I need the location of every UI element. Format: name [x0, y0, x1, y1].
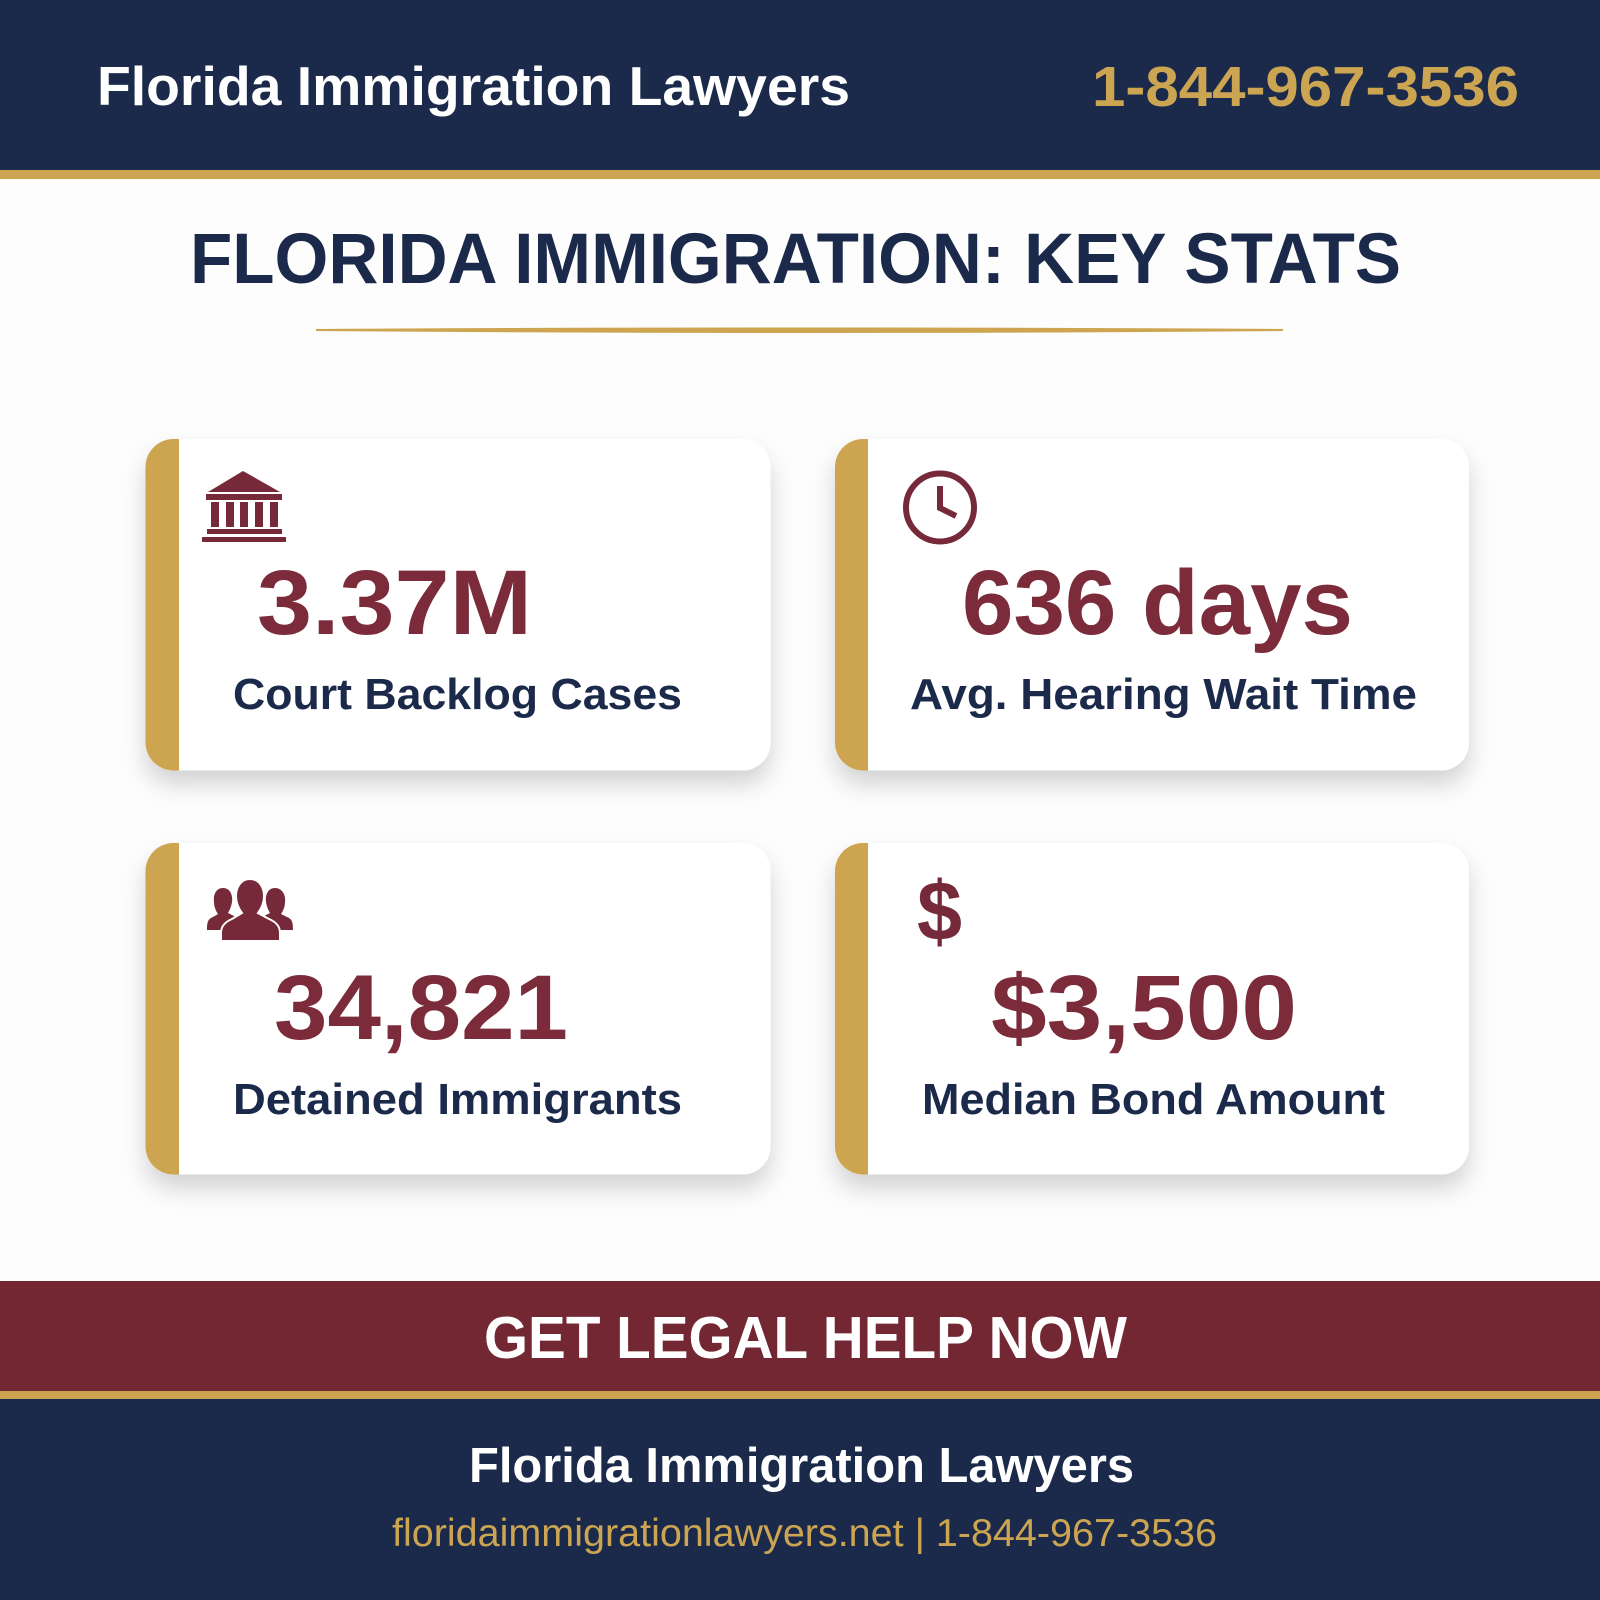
panel: hearing wait — [835, 439, 1469, 770]
center person — [221, 879, 280, 941]
header phone number: 1-844-967-3536 — [1092, 55, 1519, 119]
panel: court backlog — [146, 439, 770, 770]
icon: dollar sign: $ — [917, 864, 962, 958]
stat label: Avg. Hearing Wait Time — [910, 670, 1417, 719]
icon: clock — [906, 474, 974, 542]
title: FLORIDA IMMIGRATION: KEY STATS — [190, 220, 1401, 299]
header band — [0, 0, 1600, 179]
footer firm name: Florida Immigration Lawyers — [469, 1439, 1134, 1493]
stat label: Detained Immigrants — [233, 1075, 682, 1124]
title underline — [316, 328, 1283, 333]
panel: bond — [835, 843, 1469, 1174]
stat value: 34,821 — [274, 957, 568, 1059]
header firm name: Florida Immigration Lawyers — [97, 55, 850, 117]
icon: courthouse — [202, 471, 286, 542]
call to action band — [0, 1281, 1600, 1391]
call to action band: GET LEGAL HELP NOW — [484, 1305, 1127, 1371]
stat label: Median Bond Amount — [922, 1075, 1385, 1124]
footer — [0, 1391, 1600, 1600]
stat value: $3,500 — [991, 957, 1297, 1059]
right person — [262, 888, 293, 930]
footer contact line: floridaimmigrationlawyers.net | 1-844-967-3536 — [392, 1512, 1217, 1555]
panel: detained — [146, 843, 770, 1174]
stat value: 3.37M — [257, 552, 532, 654]
stat value: 636 days — [962, 552, 1353, 654]
stat label: Court Backlog Cases — [233, 670, 682, 719]
left person — [207, 888, 236, 930]
icon: people — [207, 879, 293, 941]
